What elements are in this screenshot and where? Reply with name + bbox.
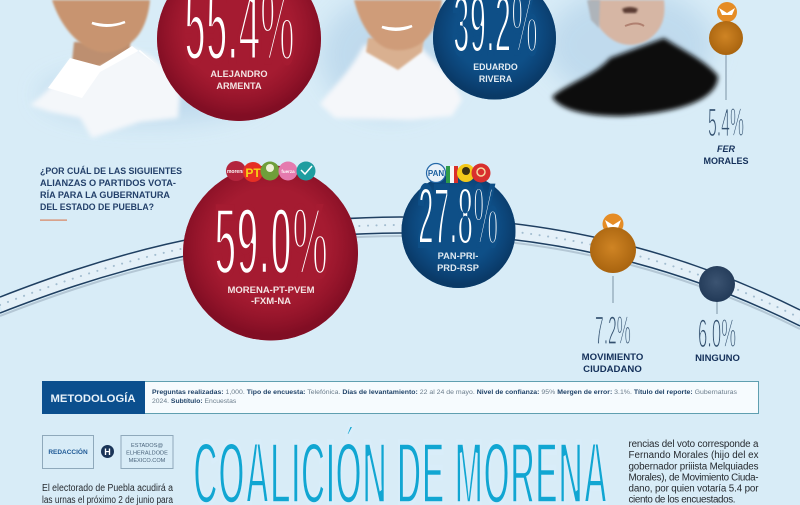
watercolor patches behind photos — [40, 0, 715, 123]
number: 6.0% — [698, 312, 736, 356]
icon: Heraldo H — [101, 445, 114, 458]
marker: Movimiento Ciudadano 7.2%: CIUDADANO — [583, 364, 642, 375]
name: PAN-PRI- — [438, 251, 478, 261]
name: NINGUNO — [695, 353, 740, 364]
name: MORENA-PT-PVEM — [227, 285, 315, 296]
circle: PAN-PRI-PRD-RSP 27.8% — [402, 170, 516, 288]
marker: Movimiento Ciudadano 7.2% — [582, 214, 644, 375]
name: MOVIMIENTO — [582, 352, 644, 363]
question heading — [40, 166, 182, 212]
number: 5.4% — [708, 101, 744, 145]
name: EDUARDO — [473, 62, 518, 72]
byline: email: MEXICO.COM — [129, 458, 166, 464]
question heading: ¿POR CUÁL DE LAS SIGUIENTES — [40, 166, 182, 176]
body text: right column: gobernador priiista Melquiades — [628, 462, 759, 472]
body text: right column: Morales), de Movimiento Ciuda- — [628, 472, 758, 484]
circle: Alejandro Armenta 55.4% — [157, 0, 321, 121]
icon: Heraldo H: H — [104, 447, 111, 457]
name: FER — [717, 144, 736, 154]
byline: redaccion: REDACCIÓN — [48, 447, 88, 456]
body text: right column: dano, por quien votaría 5.4 por — [628, 484, 759, 494]
details — [152, 389, 738, 405]
marker: Fer Morales 5.4% — [704, 2, 748, 166]
circle: PAN-PRI-PRD-RSP 27.8%: PRD-RSP — [437, 263, 479, 273]
accent line — [40, 220, 67, 221]
byline: email: ELHERALDODE — [126, 450, 168, 456]
track: curved road — [0, 217, 800, 329]
circle: Alejandro Armenta 55.4%: ARMENTA — [216, 81, 262, 91]
body text: left column — [42, 483, 173, 505]
label: METODOLOGÍA — [50, 392, 136, 405]
number: 7.2% — [595, 309, 631, 353]
number: 27.8% — [418, 170, 498, 264]
body text: right column: rencias del voto corresponde a — [628, 439, 759, 450]
body text: right column: Fernando Morales (hijo del ex — [628, 450, 759, 461]
body text: right column — [628, 439, 759, 505]
logo — [602, 214, 624, 234]
details: Preguntas realizadas: 1,000. Tipo de encuesta: Telefónica. Días de levantamiento: 22 al 24 de mayo. Nivel de confianza: 95% Mergen de error: 3.1%. Título del reporte: Gubernaturas — [152, 389, 738, 396]
body text: left column: El electorado de Puebla acudirá a — [42, 483, 173, 494]
details: 2024. Subtítulo: Encuestas — [152, 398, 237, 405]
number: 59.0% — [214, 186, 328, 296]
party logos: Morena coalition: morena — [227, 169, 245, 175]
question heading: DEL ESTADO DE PUEBLA? — [40, 202, 154, 212]
name: ALEJANDRO — [210, 69, 268, 79]
photo: Alejandro Armenta — [30, 0, 180, 138]
circle: Morena coalition 59.0% — [183, 166, 358, 340]
question heading: ALIANZAS O PARTIDOS VOTA- — [40, 178, 176, 188]
logo — [717, 2, 737, 22]
byline: email: ESTADOS@ — [131, 443, 163, 449]
party logos: PAN PRI PRD RSP — [426, 164, 490, 183]
party logos: PAN PRI PRD RSP: PAN — [428, 169, 444, 178]
marker: Ninguno 6.0% — [695, 266, 740, 364]
photo: Eduardo Rivera — [320, 0, 462, 120]
circle: Eduardo Rivera 39.2% — [433, 0, 556, 100]
party logos: Morena coalition — [226, 161, 316, 182]
question heading: RÍA PARA LA GUBERNATURA — [40, 190, 171, 200]
methodology bar — [42, 381, 758, 414]
byline: redaccion — [42, 436, 94, 468]
circle: Morena coalition 59.0%: -FXM-NA — [251, 296, 291, 307]
party logos: Morena coalition: fuerza — [281, 169, 295, 174]
circle: Eduardo Rivera 39.2%: RIVERA — [479, 74, 513, 84]
byline: email — [121, 436, 173, 468]
party logos: Morena coalition: PT — [245, 166, 261, 180]
photo: Fer Morales — [552, 0, 718, 116]
marker: Fer Morales 5.4%: MORALES — [704, 156, 748, 166]
